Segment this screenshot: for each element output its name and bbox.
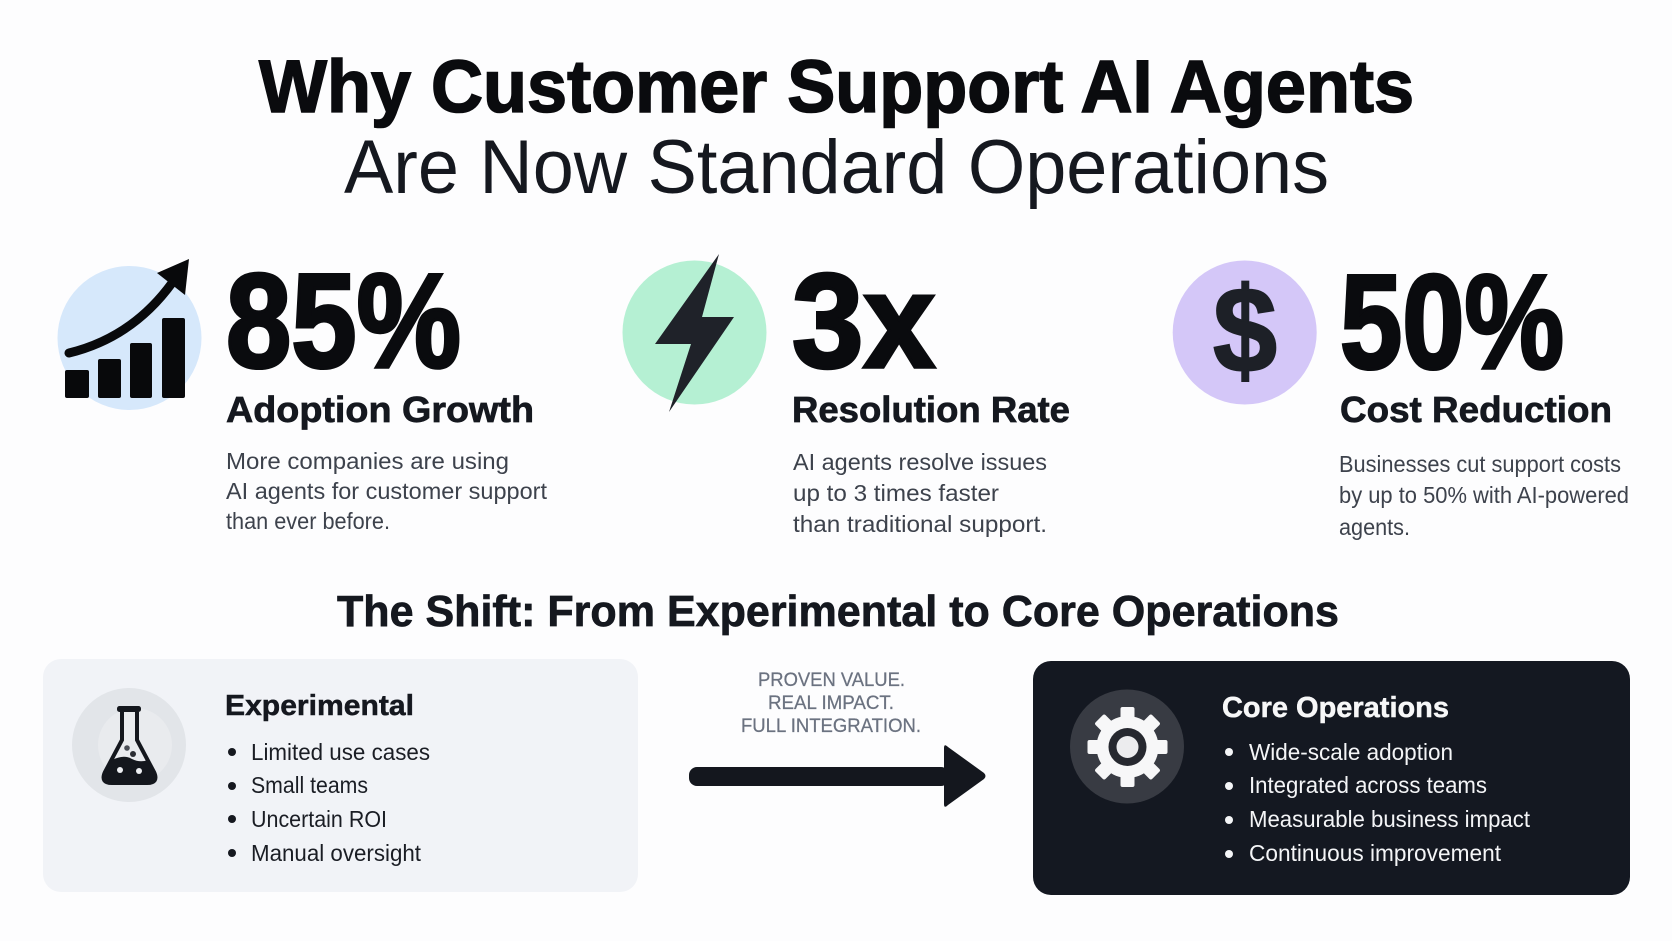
stat heading: adoption growth: Adoption Growth — [226, 389, 534, 430]
caption: transition: REAL IMPACT. — [768, 693, 894, 714]
bullet list: core operations: Measurable business impact — [1249, 806, 1531, 832]
bullet list: core operations: Continuous improvement — [1249, 840, 1502, 866]
bullet list: experimental: Manual oversight — [251, 840, 422, 866]
stat description: up to 3 times faster — [793, 480, 999, 506]
stat value: 85%: 85% — [226, 247, 461, 396]
icon: dollar sign — [1173, 260, 1317, 404]
stat description: than ever before. — [226, 508, 390, 534]
bullet list: experimental: Uncertain ROI — [251, 806, 387, 832]
stat value: 50%: 50% — [1340, 248, 1564, 397]
arrow: experimental to core — [689, 745, 986, 807]
stat heading: cost reduction: Cost Reduction — [1340, 389, 1612, 430]
caption: transition — [741, 670, 921, 737]
icon: flask — [72, 688, 186, 802]
stat description: by up to 50% with AI-powered — [1339, 482, 1629, 508]
stat description — [793, 449, 1047, 537]
bullet list: core operations: Integrated across teams — [1249, 772, 1487, 798]
stat description: Businesses cut support costs — [1339, 451, 1621, 477]
icon: growth chart — [58, 259, 202, 410]
stat: resolution rate — [622, 247, 1070, 537]
title: Why Customer Support AI Agents — [259, 45, 1414, 128]
icon: lightning bolt — [622, 254, 766, 412]
stat description — [1339, 451, 1629, 540]
panel heading: experimental: Experimental — [225, 690, 414, 722]
panel heading: core operations: Core Operations — [1222, 692, 1449, 724]
icon: dollar sign: $ — [1213, 262, 1277, 398]
bullet list: experimental: Small teams — [251, 772, 368, 798]
bullet list: experimental: Limited use cases — [251, 739, 430, 765]
stat description: than traditional support. — [793, 511, 1047, 537]
stat heading: resolution rate: Resolution Rate — [792, 389, 1070, 430]
bullet list: core operations: Wide-scale adoption — [1249, 739, 1453, 765]
title: Are Now Standard Operations — [344, 125, 1329, 210]
stat value: 3x: 3x — [792, 247, 935, 396]
panel: core operations — [1033, 661, 1630, 895]
stat description: agents. — [1339, 514, 1410, 540]
stat description: More companies are using — [226, 448, 509, 474]
panel: experimental — [43, 659, 638, 892]
stat description — [226, 448, 548, 534]
stat: adoption growth — [58, 247, 548, 534]
title — [259, 45, 1414, 210]
stat description: AI agents resolve issues — [793, 449, 1047, 475]
caption: transition: PROVEN VALUE. — [758, 670, 905, 691]
bullet list: experimental — [228, 739, 430, 866]
icon: gear — [1070, 690, 1184, 804]
bullet list: core operations — [1225, 739, 1531, 866]
stat: cost reduction — [1173, 248, 1629, 540]
section heading: The Shift: From Experimental to Core Operations — [337, 587, 1339, 636]
stat description: AI agents for customer support — [226, 478, 548, 504]
caption: transition: FULL INTEGRATION. — [741, 716, 921, 737]
